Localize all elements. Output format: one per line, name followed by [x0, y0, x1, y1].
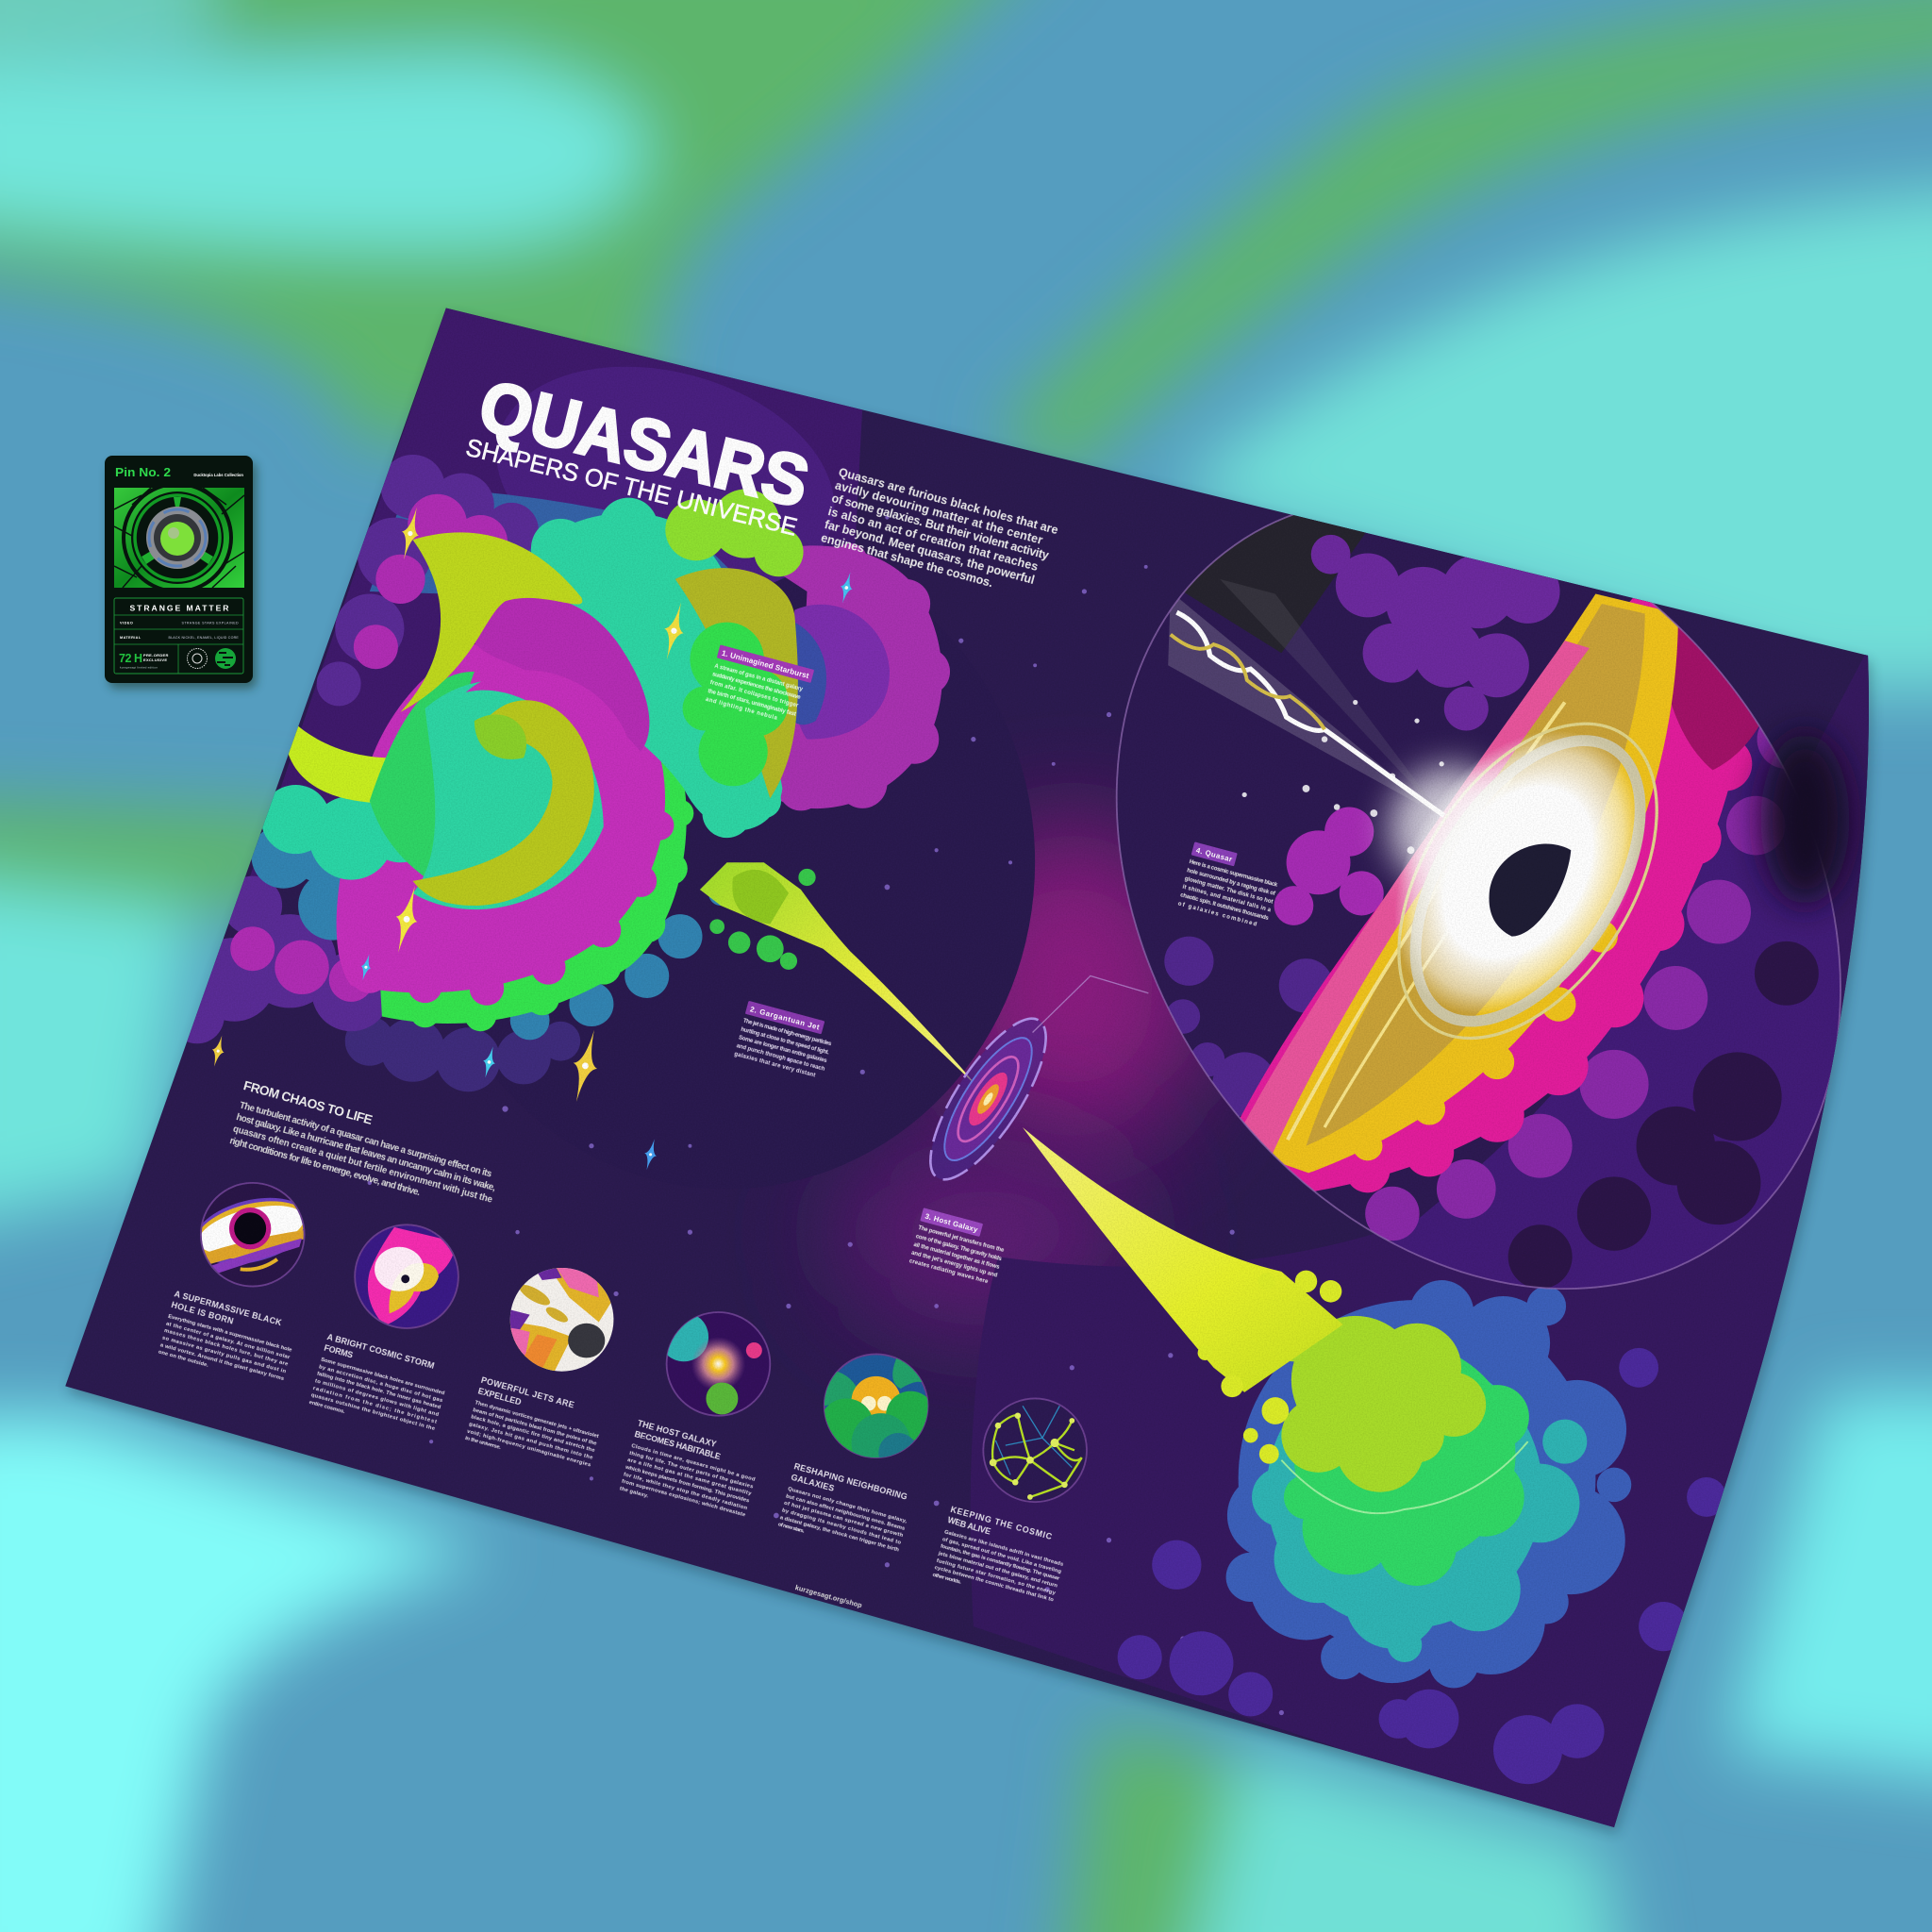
jet: upper beam toward starburst [700, 862, 981, 1091]
nebula: lime upper curl [400, 532, 582, 712]
subtitle: SHAPERS OF THE UNIVERSE [463, 433, 800, 541]
caption 2: falling into the black hole. The inner gas heated [316, 1372, 441, 1411]
lower cloud: blue outer [1226, 1280, 1631, 1688]
callout 2: Gargantuan Jet: 2. Gargantuan Jet [749, 1005, 821, 1032]
callout 4: Quasar: of galaxies combined [1177, 901, 1257, 928]
caption 6: WEB ALIVE [946, 1515, 991, 1536]
lens: tan disc [1306, 604, 1645, 1146]
nebula: blue outer layer [251, 818, 733, 1040]
callout 3: Host Galaxy: all the material together as it flows [913, 1242, 1001, 1271]
nebula: magenta ridge upper centre [462, 596, 649, 752]
caption 4: are a life hot gas at the same great quantity [626, 1457, 753, 1497]
footer credit: kurzgesagt.org/shop [794, 1583, 863, 1609]
caption 5: but can also affect neighbouring ones. Beams [785, 1493, 907, 1532]
intro paragraph [820, 466, 1059, 603]
caption 1: A SUPERMASSIVE BLACK [174, 1289, 283, 1327]
nebula: teal left [261, 785, 438, 880]
caption 5: GALAXIES [790, 1473, 836, 1493]
caption 5: of new stars. [777, 1522, 806, 1535]
dark haze behind title [370, 331, 860, 630]
nebula: lime-olive spiral [413, 700, 594, 906]
lower cloud: teal layer [1252, 1353, 1587, 1662]
nebula: outer purple haze [170, 455, 539, 1043]
caption 5: of hot jet plasma can spread a new growth [783, 1501, 904, 1539]
caption 2: quasars outshine the brightest object in the [310, 1392, 436, 1432]
callout 4: Quasar: 4. Quasar [1195, 846, 1233, 864]
info table: STRANGE STARS EXPLAINED [182, 621, 239, 625]
caption 6: of gas, spread out of the void. Like a traveling [941, 1537, 1062, 1575]
intro paragraph: of some galaxies. But their violent activity [830, 491, 1050, 562]
section intro text: right conditions for life to emerge, evolve, and thrive. [228, 1136, 422, 1198]
nebula: green band [370, 672, 475, 877]
star field [368, 515, 1284, 1715]
title: QUASARS [472, 365, 816, 523]
caption 5: by dragging its nearby clouds that lead to [781, 1507, 902, 1546]
caption 6: fueling future star formation, so the energy [936, 1558, 1057, 1596]
callout 4: Quasar: glowing matter. The disk is so hot [1184, 876, 1274, 906]
info table: BLACK NICKEL, ENAMEL, LIQUID CORE [168, 636, 239, 640]
lower-right green galaxy cloud [1023, 1127, 1726, 1784]
icon: supermassive black hole [187, 1183, 317, 1287]
callout 3: Host Galaxy [908, 1208, 1009, 1288]
pin card: Strange Matter [105, 456, 257, 689]
intro paragraph: is also an act of creation that reaches [826, 505, 1040, 574]
caption 5: a distant galaxy, the shock can trigger the birth [779, 1515, 900, 1554]
caption 1: at the center of a galaxy. At one billion solar [165, 1321, 291, 1360]
callout 4: Quasar [1177, 841, 1284, 930]
lens: magenta disc flare [1232, 591, 1780, 1192]
info table: VIDEO [120, 621, 133, 625]
section intro text: host galaxy. Like a hurricane that leaves an uncanny calm in its wake, [235, 1112, 497, 1193]
lens: left purple clouds [1274, 808, 1384, 925]
nebula: lime left band [285, 715, 448, 803]
callout 2: Gargantuan Jet: The jet is made of high-energy particles [742, 1019, 832, 1048]
icon: host galaxy habitable [659, 1312, 770, 1416]
lower cloud: purple fringe [1118, 1348, 1726, 1784]
callout 2: Gargantuan Jet: and punch through space to reach [736, 1043, 825, 1073]
caption 4: for life, while they stop the deadly radiation [623, 1472, 748, 1511]
callout 4: Quasar: chaotic spin. It outshines thousands [1179, 893, 1270, 922]
caption 2: A BRIGHT COSMIC STORM [326, 1332, 436, 1371]
callout 2: Gargantuan Jet: Some are longer than entire galaxies [738, 1035, 828, 1064]
caption 1: a wild vortex. Around it the giant galaxy forms [159, 1342, 285, 1382]
callout 2: Gargantuan Jet: hurtling at close to the speed of light. [741, 1027, 830, 1056]
lower cloud: green layer [1284, 1343, 1529, 1586]
icon: cosmic web [983, 1398, 1087, 1502]
caption 6: other worlds. [932, 1573, 962, 1586]
caption 4: THE HOST GALAXY [637, 1418, 718, 1449]
intro paragraph: Quasars are furious black holes that are [837, 466, 1059, 537]
caption 2: FORMS [323, 1342, 354, 1359]
nebula: dim lower haze [345, 1017, 580, 1091]
lower cloud: lime crown [1269, 1312, 1486, 1492]
nebula: magenta spiral [466, 670, 637, 926]
lens: jet fan [1168, 579, 1444, 818]
caption 3: EXPELLED [477, 1386, 523, 1407]
sparkle stars [208, 505, 857, 1172]
caption 3: in the universe. [464, 1436, 502, 1451]
caption 6: Galaxies are like islands adrift in vast threads [943, 1529, 1064, 1568]
lens: lower-right purple cloud mass [1331, 616, 1923, 1356]
nebula: lime right top cloud [665, 490, 804, 576]
callout 3: Host Galaxy: creates radiating waves here [908, 1258, 989, 1286]
callout 1: Unimagined Starburst: suddenly experiences the shockwave [711, 672, 802, 701]
callout 2: Gargantuan Jet [733, 1001, 838, 1081]
callout 1: Unimagined Starburst: the birth of stars, unimaginably fast [707, 689, 796, 718]
caption 3: black hole, a gigantic fire tiny and stretch the [470, 1414, 596, 1454]
info table: EXCLUSIVE [143, 658, 167, 662]
lens: gold rings [1346, 678, 1710, 1084]
lens: dark shadow cloud [1508, 941, 1819, 1289]
caption 3: Then dynamic vortices generate jets + ultraviolet [475, 1400, 599, 1440]
caption 2: Some supermassive black holes are surrounded [320, 1357, 445, 1397]
callout 2: Gargantuan Jet: galaxies that are very distant [733, 1052, 816, 1079]
callout 3: Host Galaxy: core of the galaxy. The gravity holds [915, 1234, 1003, 1262]
caption 6: cycles between the cosmic threads that link to [934, 1565, 1055, 1604]
section intro text: The turbulent activity of a quasar can have a surprising effect on its [239, 1100, 492, 1180]
callout 3: Host Galaxy: The powerful jet transfers from the [917, 1225, 1005, 1254]
right edge shadow [1760, 733, 1849, 906]
callout 4: Quasar: Here is a cosmic supermassive black [1189, 859, 1278, 889]
caption 6: jets blow material out of the galaxy, and return [937, 1551, 1058, 1590]
caption 5: Quasars not only change their home galaxy, [787, 1487, 908, 1524]
lens: purple clouds upper [1311, 535, 1560, 731]
nebula: magenta upper lobes [230, 494, 508, 1002]
quasars poster [64, 308, 1877, 1837]
pin title: Pin No. 2 [115, 466, 171, 479]
caption 4 [618, 1418, 763, 1525]
caption 1: masses these black holes lure, but they are [163, 1328, 289, 1368]
intro paragraph: far beyond. Meet quasars, the powerful [824, 518, 1036, 587]
caption 4: Clouds in time are, quasars might be a good [630, 1443, 756, 1483]
caption 3: void; high-frequency unimaginable energies [466, 1428, 592, 1469]
caption 3: galaxy. Jets hit gas and push them into the [468, 1422, 594, 1461]
nebula: green outer crescent [370, 636, 693, 1031]
caption 4: the galaxy. [619, 1486, 649, 1500]
callout 1: Unimagined Starburst: and lighting the nebula [705, 697, 778, 722]
callout 3: Host Galaxy: 3. Host Galaxy [924, 1212, 979, 1234]
callout 1: Unimagined Starburst: from afar. It collapses to trigger [709, 680, 799, 709]
nebula: upper-left exploding cloud [170, 455, 950, 1091]
caption 4: which keeps planets from forming. This provides [624, 1464, 751, 1505]
caption 3: POWERFUL JETS ARE [480, 1375, 575, 1409]
info table: STRANGE MATTER [130, 604, 229, 613]
lower cloud: yellow splashes [1198, 1271, 1341, 1464]
caption 2: by an accretion disc, a huge disc of hot gas [318, 1364, 444, 1404]
caption 2: to millions of degrees glows with light and [314, 1378, 440, 1418]
lens: quasar close-up circle [967, 358, 1932, 1429]
caption 4: thing for life. The outer parts of the galaxies [628, 1451, 755, 1491]
caption 1: HOLE IS BORN [171, 1300, 235, 1325]
section intro text [228, 1100, 501, 1218]
caption 1: so massive as gravity pulls gas and dust in [161, 1336, 287, 1374]
caption 4: BECOMES HABITABLE [634, 1429, 722, 1461]
lens: crimson upper flare [1657, 604, 1787, 770]
icon: powerful jets [500, 1264, 624, 1372]
caption 5: RESHAPING NEIGHBORING [793, 1461, 908, 1502]
caption 1: Everything starts with a supermassive black hole [167, 1314, 293, 1354]
lens: pink streak [1242, 641, 1590, 1156]
nebula: magenta wisp at right [750, 543, 950, 810]
section heading: from chaos to life: FROM CHAOS TO LIFE [242, 1078, 374, 1127]
info table: kurzgesagt limited edition [120, 666, 158, 670]
nebula: teal core [413, 680, 613, 909]
caption 6 [931, 1505, 1072, 1610]
section intro text: quasars often create a quiet but fertile environment with just the [232, 1124, 494, 1206]
intro paragraph: engines that shape the cosmos. [820, 531, 994, 590]
caption 5 [777, 1461, 915, 1560]
callout 1: Unimagined Starburst [705, 644, 814, 727]
pin product image [114, 484, 244, 591]
icon: bright cosmic storm [355, 1224, 458, 1328]
caption 2: radiation from the disc; the brightest [312, 1386, 438, 1425]
caption 2: entire cosmos. [308, 1400, 346, 1415]
callout 4: Quasar: hole surrounded by a raging disk of [1186, 868, 1276, 897]
nebula: teal right top cloud [518, 498, 782, 838]
caption 4: from supernovas explosions; which devastate [621, 1479, 746, 1519]
caption 2 [308, 1332, 453, 1440]
jet: lower beam toward recipient galaxy [1023, 1127, 1343, 1392]
caption 3 [464, 1375, 607, 1475]
caption 1 [158, 1289, 300, 1390]
nebula: olive right cloud [675, 568, 798, 798]
caption 6: fountain, the gas is constantly flowing. The quasar [940, 1544, 1060, 1582]
callout 1: Unimagined Starburst: 1. Unimagined Starburst [721, 649, 810, 680]
lens: white sparks [1242, 700, 1444, 854]
collection label: Ducktopia Labs Collection [193, 473, 243, 477]
callout 1: Unimagined Starburst: A stream of gas in a distant galaxy [714, 663, 804, 692]
nebula: wisp inner shade [791, 605, 890, 740]
lens: dark upper-left wedge [1183, 499, 1368, 653]
callout 3: Host Galaxy: and the jet's energy lights up and [910, 1251, 998, 1279]
info table: 72 H [119, 652, 142, 665]
nebula: blue cloud behind wisp [777, 616, 826, 724]
caption 3: beam of hot particles blast from the poles of the [473, 1407, 598, 1447]
lens: white core [1343, 684, 1692, 1060]
galaxy: host galaxy at centre [910, 1003, 1066, 1195]
intro paragraph: avidly devouring matter at the center [834, 478, 1044, 547]
caption 6: KEEPING THE COSMIC [949, 1505, 1054, 1541]
lens: purple-magenta flare clouds [1365, 709, 1816, 1241]
nebula: magenta body [337, 633, 674, 1006]
info table: MATERIAL [120, 636, 142, 640]
icon: reshaping neighboring galaxies [820, 1354, 935, 1473]
lens: yellow disc [1259, 594, 1678, 1173]
caption 1: one on the outside. [158, 1350, 209, 1369]
nebula: green right cloud [683, 623, 789, 786]
connector line: galaxy to lens [1033, 975, 1148, 1033]
callout 4: Quasar: it shines, and material falls in a [1182, 885, 1272, 914]
info table: PRE-ORDER [143, 653, 169, 658]
info table [114, 598, 243, 674]
lens: black hole [1489, 844, 1571, 937]
